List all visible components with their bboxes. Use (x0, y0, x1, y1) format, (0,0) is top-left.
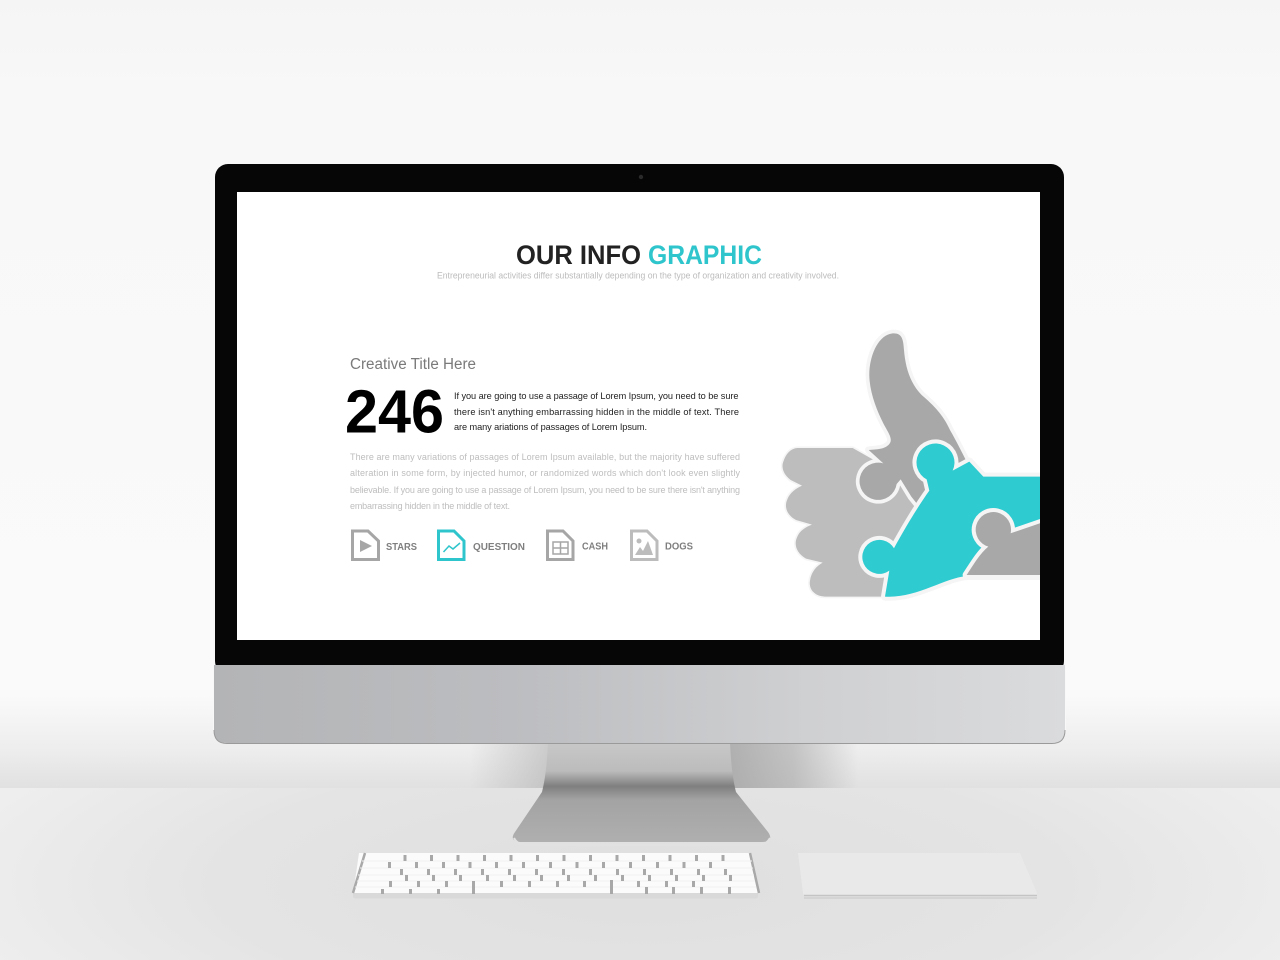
background: desk (0, 788, 1280, 960)
intro text block: are many ariations of passages of Lorem Ipsum. (454, 422, 647, 432)
monitor shadow on wall (470, 744, 858, 788)
icon: question chart file (438, 531, 464, 560)
label: question: QUESTION (473, 541, 525, 553)
thumbs up puzzle graphic (783, 333, 1042, 597)
label: cash: CASH (582, 540, 608, 552)
big number 246: 246 (345, 378, 444, 446)
title (516, 240, 762, 270)
icon: dogs image file (632, 531, 657, 560)
body text block: embarrassing hidden in the middle of text. (350, 501, 510, 511)
body text block (350, 452, 740, 511)
title: OUR INFO (516, 240, 641, 270)
section heading: Creative Title Here (350, 356, 476, 373)
keyboard key gaps (381, 855, 732, 894)
trackpad (798, 853, 1037, 898)
icon: cash table file (548, 531, 573, 560)
puzzle piece: forearm (967, 512, 1042, 575)
keyboard (353, 853, 759, 898)
icon row (352, 531, 693, 560)
label: stars: STARS (386, 541, 417, 553)
icon: stars play file (352, 531, 378, 560)
title: GRAPHIC (648, 240, 762, 270)
monitor body (213, 162, 1066, 744)
body text block: believable. If you are going to use a passage of Lorem Ipsum, you need to be sure there isn't anything (350, 485, 740, 495)
body text block: There are many variations of passages of Lorem Ipsum available, but the majority have suffered (350, 452, 740, 462)
keyboard row lines (355, 861, 756, 887)
intro text block (454, 391, 739, 432)
label: dogs: DOGS (665, 540, 693, 552)
intro text block: If you are going to use a passage of Lorem Ipsum, you need to be sure (454, 391, 738, 401)
puzzle piece: wrist teal (862, 444, 1042, 597)
screen panel (237, 192, 1042, 640)
puzzle piece: fingers (783, 448, 927, 597)
puzzle piece: thumb (860, 333, 967, 503)
intro text block: there isn't anything embarrassing hidden in the middle of text. There (454, 407, 739, 417)
monitor stand (513, 742, 770, 845)
subtitle: Entrepreneurial activities differ substantially depending on the type of organization and creativity involved. (437, 270, 839, 280)
webcam (639, 175, 643, 179)
body text block: alteration in some form, by injected humor, or randomized words which don't look even slightly (350, 468, 740, 478)
